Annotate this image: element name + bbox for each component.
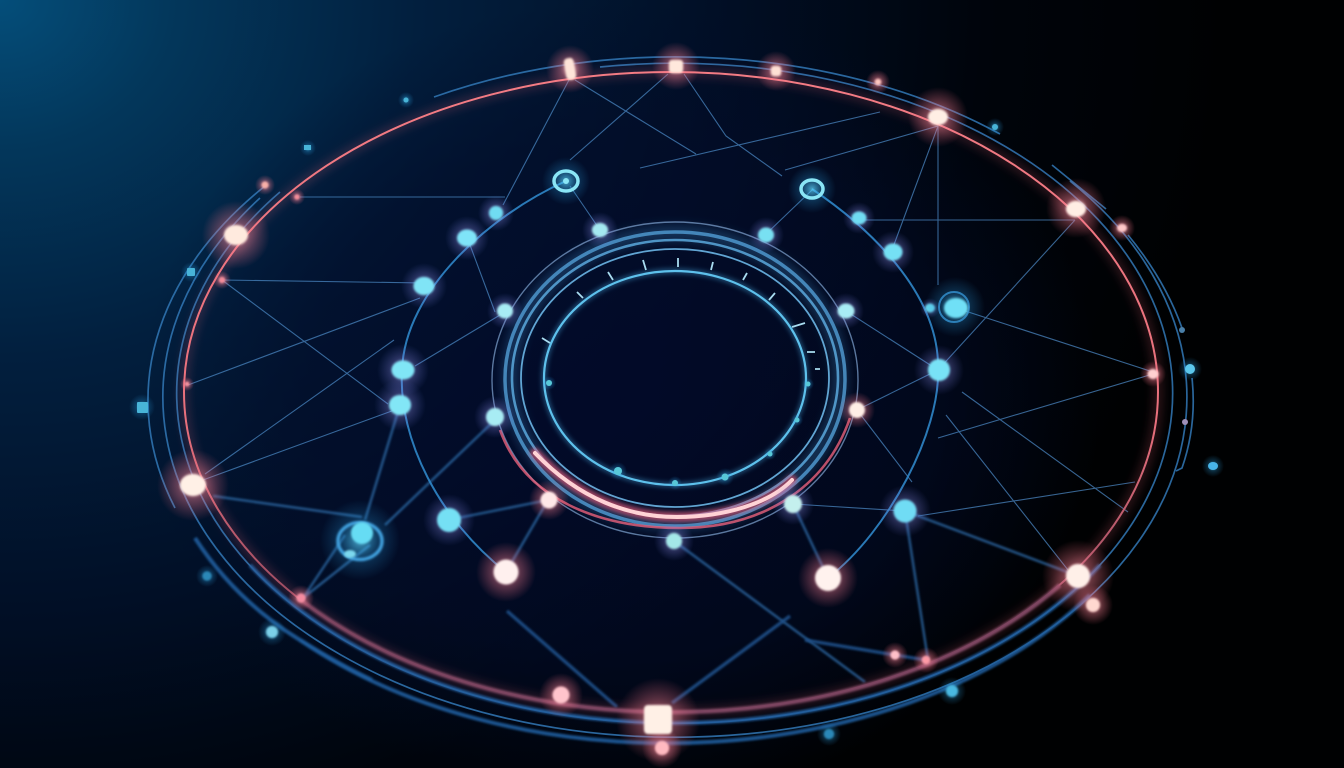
main pink ring	[184, 72, 1158, 712]
small outer satellites	[129, 92, 1224, 746]
blurred bottom of outer rings	[195, 538, 1100, 743]
blue nodes	[374, 195, 964, 561]
inner node arcs	[402, 181, 938, 578]
ring nodes	[320, 157, 985, 580]
outer arc segments	[148, 57, 1193, 737]
central ring	[492, 222, 858, 538]
network connection lines	[188, 74, 1153, 570]
pink nodes	[157, 42, 1166, 768]
blurred foreground lines	[213, 405, 1078, 682]
central pink highlight arc	[535, 453, 792, 517]
